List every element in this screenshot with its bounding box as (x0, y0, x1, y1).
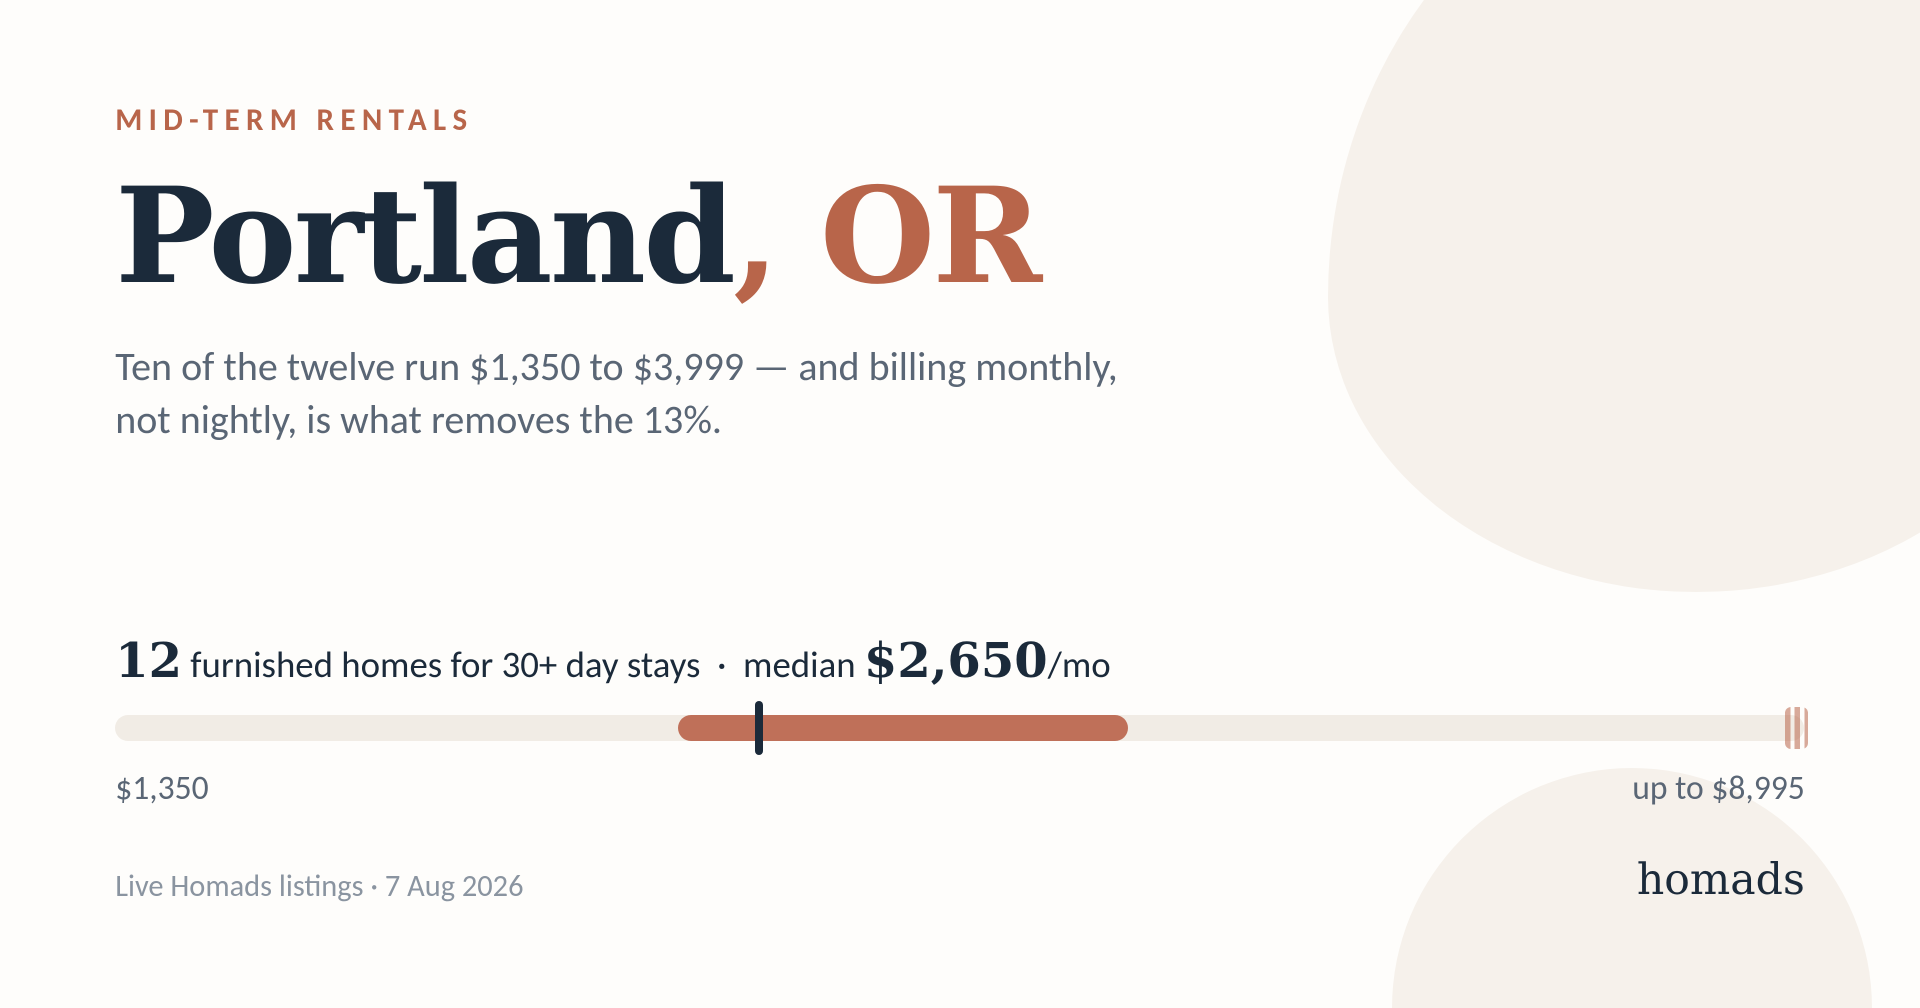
subtitle: Ten of the twelve run $1,350 to $3,999 — and billing monthly, (115, 342, 1118, 391)
bar track (115, 715, 1804, 741)
overflow stripes marker (1785, 707, 1808, 749)
stats line: 12 furnished homes for 30+ day stays · median $2,650/mo (115, 632, 1111, 688)
median marker (755, 700, 763, 755)
brand wordmark: homads (1637, 855, 1805, 905)
decorative blob: top right (1328, 0, 1920, 592)
price range bar (115, 701, 1808, 755)
range label: maximum: up to $8,995 (1632, 768, 1805, 808)
subtitle: not nightly, is what removes the 13%. (115, 395, 722, 444)
eyebrow: MID-TERM RENTALS (115, 101, 473, 139)
range label: minimum: $1,350 (115, 768, 209, 808)
decorative blob: bottom right (1392, 768, 1872, 1008)
interquartile range fill (678, 715, 1128, 741)
title: Portland, OR (115, 159, 1040, 314)
subtitle (115, 342, 1118, 444)
source note: Live Homads listings · 7 Aug 2026 (115, 868, 524, 905)
